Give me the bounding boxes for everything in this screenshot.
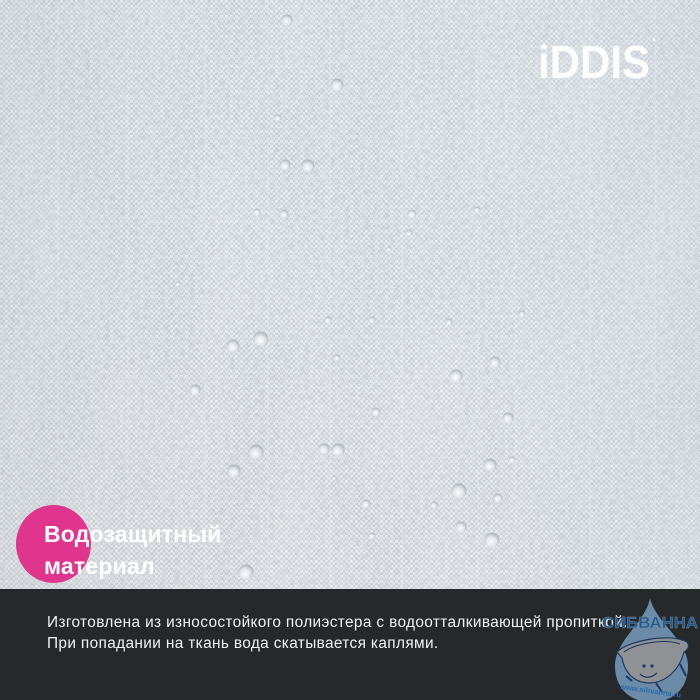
heading [44,521,222,579]
badge: pink circle [16,505,91,583]
droplets [176,14,526,580]
dark caption panel [0,589,700,700]
vertical thread streaks [58,0,655,590]
icon: water drop [615,598,688,700]
heading: материал [44,553,155,579]
logo: iddis: iDDIS [538,36,650,88]
caption text [47,614,628,652]
icon: smiling bathtub [617,638,688,692]
caption text: Изготовлена из износостойкого полиэстера с водоотталкивающей пропиткой. [47,614,628,631]
heading: Водозащитный [44,521,222,547]
website: www.sibvanna.ru [619,682,682,700]
brand name: СИБВАННА [602,615,698,632]
caption text: При попадании на ткань вода скатывается каплями. [47,635,439,652]
